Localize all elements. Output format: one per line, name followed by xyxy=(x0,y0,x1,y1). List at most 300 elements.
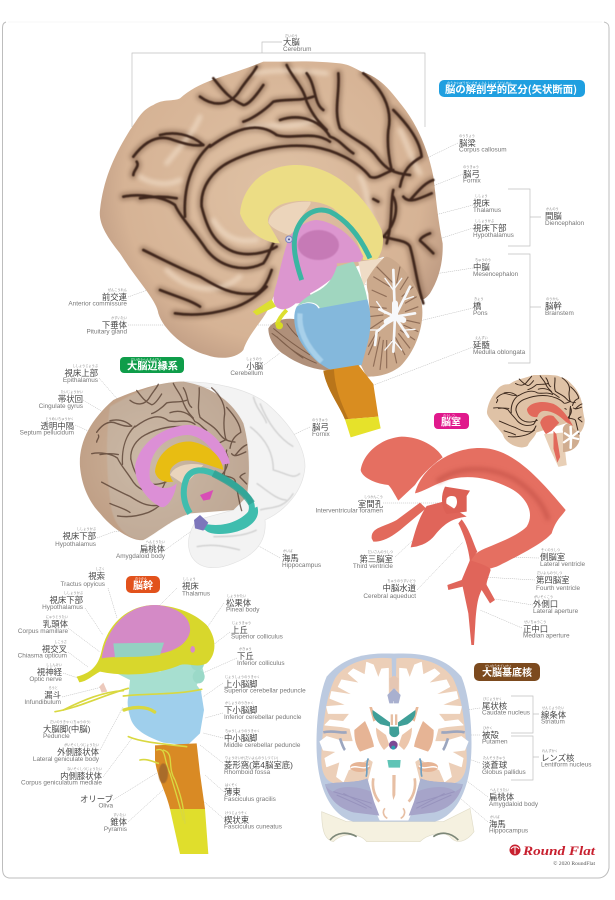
tan limbic cortex xyxy=(80,382,249,540)
midbrain region xyxy=(113,653,204,697)
hollow below callosum xyxy=(268,202,311,235)
label: corpus mamillare xyxy=(18,614,69,635)
label: corpus geniculatum mediale xyxy=(21,766,103,786)
label: brainstem: のうかん xyxy=(546,296,560,301)
bracket: brainstem xyxy=(508,254,541,363)
label: middle cerebellar peduncle: ちゅうしょうのうきゃく xyxy=(225,728,260,733)
label: anterior commissure: 前交連 xyxy=(102,292,128,302)
label: oliva xyxy=(80,794,114,810)
label: medulla oblongata: えんずい xyxy=(475,335,488,340)
label: thalamus: Thalamus xyxy=(473,207,501,214)
label: brainstem: Brainstem xyxy=(545,310,574,317)
teal block on thalamus xyxy=(113,643,164,657)
label: medulla oblongata: 延髄 xyxy=(473,340,490,350)
label: middle cerebellar peduncle: Middle cerebellar peduncle xyxy=(224,742,301,749)
main sagittal brain illustration xyxy=(100,61,443,437)
cerebrum sulci soft shading xyxy=(123,65,433,315)
pons and medulla xyxy=(294,299,371,371)
label: cerebral aqueduct: Cerebral aqueduct xyxy=(363,593,416,600)
label: inferior cerebellar peduncle: 下小脳脚 xyxy=(224,705,258,715)
lower spinal cord xyxy=(345,417,381,437)
label: brainstem hypothalamus: 視床下部 xyxy=(50,595,84,605)
label: optic nerve: ししんけい xyxy=(46,662,62,667)
cerebrum sulci dark lines xyxy=(123,65,433,315)
label: globus pallidus: たんそうきゅう xyxy=(483,755,505,760)
label: third ventricle: だいさんのうしつ xyxy=(368,549,393,554)
label: hypothalamus: ししょうかぶ xyxy=(475,218,495,223)
label: fasciculus gracilis xyxy=(224,782,276,803)
label: striatum: 線条体 xyxy=(541,710,567,720)
label: chiasma opticum: しこうさ xyxy=(54,639,67,644)
label: lentiform nucleus: Lentiform nucleus xyxy=(541,762,591,768)
banner: basal ganglia: 大脳基底核 xyxy=(482,664,532,679)
label: limbic fornix: 脳弓 xyxy=(312,422,329,432)
label: pituitary gland: かすいたい xyxy=(111,315,127,320)
label: brainstem thalamus: ししょう xyxy=(183,576,196,581)
label: lentiform nucleus xyxy=(541,748,591,768)
label: cerebrum: 大脳 xyxy=(283,37,300,47)
label: fasciculus gracilis: 薄束 xyxy=(224,787,241,797)
label: hippocampus: かいば xyxy=(283,548,293,553)
label: cerebellum: Cerebellum xyxy=(230,370,263,377)
left inferior arm xyxy=(372,503,426,542)
anterior lobe folia xyxy=(272,323,317,363)
label: inferior cerebellar peduncle: かしょうのうきゃく xyxy=(225,700,254,705)
thalamus and hypothalamus xyxy=(274,220,363,309)
label: cingulate gyrus: Cingulate gyrus xyxy=(39,403,83,410)
label: cerebral aqueduct: ちゅうのうすいどう xyxy=(387,578,416,583)
base dark folds xyxy=(330,833,458,840)
label: middle cerebellar peduncle: 中小脳脚 xyxy=(224,733,258,743)
label: superior colliculus: じょうきゅう xyxy=(232,620,251,625)
label: cingulate gyrus: たいじょうかい xyxy=(61,389,83,394)
label: middle cerebellar peduncle xyxy=(224,728,301,749)
label: pons: Pons xyxy=(473,310,488,317)
cerebellum white matter arbor xyxy=(370,270,415,352)
label: corpus geniculatum mediale: 内側膝状体 xyxy=(60,771,103,781)
label: fornix: のうきゅう xyxy=(463,164,479,169)
label: tractus opticus: しさく xyxy=(95,566,105,571)
label: fourth ventricle: 第四脳室 xyxy=(536,575,570,585)
label: inferior colliculus: かきゅう xyxy=(239,646,252,651)
label: cerebrum xyxy=(283,33,311,53)
label: fasciculus cuneatus xyxy=(224,810,282,830)
label: pineal body xyxy=(226,593,260,614)
label: thalamus xyxy=(473,193,501,214)
label: corpus geniculatum mediale: ないそくしつじょうたい xyxy=(67,766,102,771)
mesencephalon xyxy=(297,262,367,308)
label: corpus mamillare: Corpus mamillare xyxy=(18,628,68,635)
label: cerebellum: 小脳 xyxy=(246,361,264,371)
coronal left half xyxy=(316,653,394,822)
banner: ventricles: のうしつ xyxy=(443,412,455,418)
label: brainstem hypothalamus: ししょうかぶ xyxy=(64,590,84,595)
bracket: lentiform nucleus xyxy=(511,736,539,780)
label: cerebrum: だいのう xyxy=(285,33,298,38)
label: fasciculus cuneatus: 楔状束 xyxy=(224,815,250,825)
label: cingulate gyrus xyxy=(39,389,83,410)
label: basal amygdaloid body xyxy=(489,787,539,808)
label: cerebellum: しょうのう xyxy=(246,356,262,361)
pineal pink dot xyxy=(190,646,195,653)
label: lateral aperture xyxy=(533,594,579,615)
label: rhomboid fossa: Rhomboid fossa xyxy=(224,769,271,776)
banner: anatomical divisions: のう かいぼうがくてき くぶん しじょうだんめん xyxy=(447,80,512,85)
label: median aperture: 正中口 xyxy=(523,624,548,634)
label: pyramis: 錐体 xyxy=(110,817,128,827)
label: infundibulum xyxy=(24,685,61,706)
label: hippocampus: 海馬 xyxy=(282,553,299,563)
label: optic nerve: Optic nerve xyxy=(29,676,62,683)
label: globus pallidus: 淡蒼球 xyxy=(482,760,508,770)
label: peduncle: 大脳脚(中脳) xyxy=(43,724,91,734)
small cerebellum xyxy=(563,423,580,452)
label: corpus geniculatum mediale: Corpus geniculatum mediale xyxy=(21,780,102,786)
label: interventricular foramen: 室間孔 xyxy=(358,499,384,509)
label: limbic fornix: のうきゅう xyxy=(312,417,328,422)
skull base bone xyxy=(322,808,474,842)
logo: Round Flat xyxy=(510,843,595,867)
label: interventricular foramen xyxy=(316,494,384,514)
aqueduct xyxy=(458,519,477,562)
label: pituitary gland: Pituitary gland xyxy=(86,328,127,336)
label: lateral aperture: がいそくこう xyxy=(534,594,553,599)
label: diencephalon: かんのう xyxy=(546,206,559,211)
label: amygdaloid body: Amygdaloid body xyxy=(116,553,166,560)
label: epithalamus: 視床上部 xyxy=(64,368,99,378)
banner: basal ganglia xyxy=(474,663,540,681)
label: optic nerve xyxy=(29,662,63,683)
label: septum pellucidum: 透明中隔 xyxy=(40,421,74,431)
brainstem illustration xyxy=(55,605,214,854)
label: inferior cerebellar peduncle xyxy=(224,700,302,721)
label: fasciculus cuneatus: けつじょうそく xyxy=(225,810,247,815)
label: basal hippocampus xyxy=(489,814,528,834)
label: peduncle: Peduncle xyxy=(43,733,70,740)
label: corpus callosum: のうりょう xyxy=(459,133,475,138)
foramen ring xyxy=(442,487,470,514)
label: superior colliculus: 上丘 xyxy=(231,625,248,635)
label: pyramis: Pyramis xyxy=(104,826,127,833)
label: brainstem thalamus: Thalamus xyxy=(182,590,210,598)
label: pineal body: Pineal body xyxy=(226,606,260,614)
label: lentiform nucleus: れんずかく xyxy=(542,748,558,753)
cingulate band xyxy=(135,425,230,507)
label: median aperture: Median aperture xyxy=(523,632,570,640)
coronal right half xyxy=(394,653,472,822)
label: third ventricle: 第三脳室 xyxy=(360,554,393,564)
label: septum pellucidum xyxy=(20,416,74,436)
label: interventricular foramen: しつかんこう xyxy=(364,494,383,499)
olive shading xyxy=(159,763,168,783)
corpus callosum xyxy=(240,165,383,260)
label: hypothalamus: 視床下部 xyxy=(473,223,507,233)
label: basal amygdaloid body: へんとうたい xyxy=(490,787,509,792)
bracket: diencephalon xyxy=(508,189,541,246)
label: infundibulum: ろうと xyxy=(48,685,58,690)
label: striatum xyxy=(541,705,567,726)
label: limbic fornix xyxy=(312,417,331,438)
label: corpus mamillare: にゅうとうたい xyxy=(46,614,68,619)
label: epithalamus: Epithalamus xyxy=(63,377,98,384)
label: fourth ventricle xyxy=(536,570,580,592)
label: peduncle: だいのうきゃく(ちゅうのう) xyxy=(50,719,90,724)
label: corpus mamillare: 乳頭体 xyxy=(43,619,69,629)
banner: brainstem: 脳幹 xyxy=(133,577,153,592)
label: mesencephalon: ちゅうのう xyxy=(475,257,491,262)
banner: limbic system: 大脳辺縁系 xyxy=(127,358,178,372)
label: thalamus: ししょう xyxy=(475,193,488,198)
label: globus pallidus: Globus pallidus xyxy=(482,769,526,776)
label: caudate nucleus: びじょうかく xyxy=(483,696,502,701)
label: infundibulum: 漏斗 xyxy=(44,690,61,700)
banner: brainstem xyxy=(126,576,160,593)
label: pons xyxy=(473,296,488,317)
label: lateral ventricle: Lateral ventricle xyxy=(540,561,586,568)
banner: basal ganglia: だいのうきていかく xyxy=(485,663,512,668)
label: putamen: Putamen xyxy=(482,738,508,746)
pons and medulla block xyxy=(128,691,204,745)
label: brainstem thalamus xyxy=(182,576,210,598)
cerebellum xyxy=(360,257,422,377)
cord front strip xyxy=(323,369,348,419)
orange cord segment xyxy=(155,743,205,809)
label: amygdaloid body xyxy=(116,539,166,560)
label: chiasma opticum: 視交叉 xyxy=(42,644,68,654)
label: fasciculus cuneatus: Fasciculus cuneatus xyxy=(224,824,282,830)
label: third ventricle xyxy=(353,549,393,570)
cerebellum anterior lobe behind brainstem xyxy=(268,319,333,370)
label: median aperture: せいちゅうこう xyxy=(524,619,546,624)
label: oliva: オリーブ xyxy=(80,794,114,804)
label: pineal body: しょうかたい xyxy=(227,593,246,598)
label: inferior colliculus xyxy=(237,646,285,667)
label: pons: 橋 xyxy=(473,301,482,311)
third ventricle xyxy=(411,502,467,547)
small brainstem xyxy=(544,432,567,467)
label: basal hippocampus: かいば xyxy=(490,814,500,819)
coronal midline structures xyxy=(389,727,399,737)
label: cerebellum xyxy=(230,356,264,377)
limbic translucent overlay xyxy=(107,382,249,540)
label: anterior commissure: Anterior commissure xyxy=(68,300,127,308)
label: basal amygdaloid body: 扁桃体 xyxy=(489,792,515,802)
fornix and hippocampus xyxy=(184,470,252,528)
label: caudate nucleus: 尾状核 xyxy=(482,701,508,711)
label: lateral ventricle xyxy=(540,547,586,568)
mammillary pink xyxy=(200,490,213,501)
banner: brainstem: のうかん xyxy=(135,576,147,580)
label: cingulate gyrus: 帯状回 xyxy=(58,394,83,404)
label: lateral geniculate body: がいそくしつじょうたい xyxy=(64,742,99,747)
label: pyramis: すいたい xyxy=(113,812,126,817)
label: lateral aperture: Lateral aperture xyxy=(533,608,579,615)
label: hippocampus: Hippocampus xyxy=(282,562,321,569)
label: hypothalamus: Hypothalamus xyxy=(473,232,514,239)
label: rhomboid fossa: 菱形窩(第4脳室底) xyxy=(224,760,293,770)
small infundibulum xyxy=(99,683,107,693)
pituitary stalk and gland xyxy=(276,310,287,329)
label: limbic hypothalamus: 視床下部 xyxy=(62,531,97,541)
label: lateral ventricle: そくのうしつ xyxy=(541,547,560,552)
label: optic nerve: 視神経 xyxy=(37,667,63,677)
label: fornix xyxy=(463,164,482,184)
anterior commissure ring xyxy=(286,236,292,243)
label: medulla oblongata xyxy=(473,335,526,356)
white translucent hemisphere xyxy=(183,382,305,568)
label: superior cerebellar peduncle: じょうしょうのうきゃく xyxy=(225,674,260,679)
label: lateral aperture: 外側口 xyxy=(533,599,558,609)
label: superior colliculus: Superior colliculus xyxy=(231,634,283,640)
optic tract xyxy=(253,299,276,315)
label: lateral ventricle: 側脳室 xyxy=(540,552,565,562)
label: thalamus: 視床 xyxy=(473,198,490,208)
cranial nerves xyxy=(55,688,202,823)
thalamus dark oval xyxy=(298,230,339,260)
cerebral ventricles large model xyxy=(361,437,566,645)
label: septum pellucidum: Septum pellucidum xyxy=(20,430,74,436)
label: fasciculus gracilis: はくそく xyxy=(225,782,238,787)
cerebrum xyxy=(100,61,443,358)
label: inferior cerebellar peduncle: Inferior cerebellar peduncle xyxy=(224,714,302,721)
fourth ventricle and apertures xyxy=(447,560,495,645)
lateral ventricle arch xyxy=(415,448,566,573)
label: median aperture xyxy=(523,619,570,640)
label: epithalamus: ししょうじょうぶ xyxy=(72,363,99,368)
label: rhomboid fossa xyxy=(224,755,293,776)
label: inferior colliculus: 下丘 xyxy=(237,651,254,661)
label: putamen: 被殻 xyxy=(482,730,499,740)
label: pons: きょう xyxy=(474,296,484,301)
small cerebellum arbor xyxy=(564,427,578,448)
small reference brain with ventricles xyxy=(487,375,585,467)
lime cord segment xyxy=(170,809,208,854)
label: brainstem hypothalamus xyxy=(42,590,84,611)
label: mesencephalon: Mesencephalon xyxy=(473,271,519,278)
label: limbic fornix: Fornix xyxy=(312,431,331,438)
bracket: cerebrum xyxy=(132,42,425,127)
label: fasciculus gracilis: Fasciculus gracilis xyxy=(224,796,276,803)
label: chiasma opticum: Chiasma opticum xyxy=(18,652,67,660)
label: striatum: せんじょうたい xyxy=(542,705,564,710)
label: brainstem xyxy=(545,296,574,317)
small cerebrum xyxy=(487,375,585,447)
label: putamen: ひかく xyxy=(483,725,493,730)
label: lateral geniculate body: Lateral geniculate body xyxy=(33,756,100,763)
label: pituitary gland xyxy=(86,315,128,336)
label: third ventricle: Third ventricle xyxy=(353,563,393,570)
banner: limbic system: だいのうへんえんけい xyxy=(131,356,161,362)
cerebellum folia xyxy=(368,267,420,370)
cerebrum highlights xyxy=(140,71,420,289)
label: amygdaloid body: 扁桃体 xyxy=(140,544,166,554)
label: tractus opticus: 視索 xyxy=(88,571,105,581)
label: medulla oblongata: Medulla oblongata xyxy=(473,349,526,356)
coronal section xyxy=(316,653,474,842)
label: epithalamus xyxy=(63,363,99,384)
label: pineal body: 松果体 xyxy=(226,598,252,608)
small ventricle system xyxy=(527,402,573,426)
label: interventricular foramen: Interventricular foramen xyxy=(316,508,383,514)
banner: ventricles: 脳室 xyxy=(441,414,461,428)
label: superior colliculus xyxy=(231,620,283,640)
banner: ventricles xyxy=(434,412,469,429)
white hemisphere gyri xyxy=(197,397,300,550)
label: mesencephalon: 中脳 xyxy=(473,262,490,272)
label: corpus callosum: 脳梁 xyxy=(459,138,476,148)
label: striatum: Striatum xyxy=(541,718,565,726)
label: limbic hypothalamus: ししょうかぶ xyxy=(77,526,97,531)
logo: Round Flat: © 2020 RoundFlat xyxy=(553,860,595,867)
label: lateral geniculate body: 外側膝状体 xyxy=(57,747,100,757)
label: fourth ventricle: Fourth ventricle xyxy=(536,585,580,592)
label: pyramis xyxy=(104,812,128,833)
colliculi bumps xyxy=(191,656,205,683)
label: septum pellucidum: とうめいちゅうかく xyxy=(45,416,74,421)
label: brainstem hypothalamus: Hypothalamus xyxy=(42,604,83,611)
label: limbic hypothalamus: Hypothalamus xyxy=(55,541,96,548)
label: fourth ventricle: だいよんのうしつ xyxy=(537,570,562,575)
label: limbic hypothalamus xyxy=(55,526,97,548)
limbic inner tan xyxy=(170,464,203,485)
label: caudate nucleus: Caudate nucleus xyxy=(482,710,530,716)
label: infundibulum: Infundibulum xyxy=(24,699,61,706)
label: anterior commissure: ぜんこうれん xyxy=(108,287,128,292)
arch inner shadow xyxy=(437,469,548,520)
limbic system brain xyxy=(80,382,305,568)
label: oliva: Oliva xyxy=(98,802,113,810)
leader lines: all dotted connectors xyxy=(62,143,539,822)
optic tract body xyxy=(77,605,214,682)
label: chiasma opticum xyxy=(18,639,68,660)
amygdala xyxy=(194,515,208,531)
cream wedge above mesencephalon xyxy=(358,258,383,288)
label: diencephalon: Diencephalon xyxy=(545,220,585,227)
label: corpus callosum xyxy=(459,133,507,154)
label: inferior colliculus: Inferior colliculus xyxy=(237,660,285,667)
label: anterior commissure xyxy=(68,287,128,308)
label: superior cerebellar peduncle: Superior cerebellar peduncle xyxy=(224,688,306,694)
label: tractus opticus: Tractus opyicus xyxy=(60,581,105,588)
thalamus pink xyxy=(102,605,190,658)
limbic sulci xyxy=(92,383,247,517)
fornix arch xyxy=(294,210,370,280)
label: superior cerebellar peduncle xyxy=(224,674,306,694)
label: lentiform nucleus: レンズ核 xyxy=(541,753,575,763)
label: basal hippocampus: 海馬 xyxy=(489,819,506,829)
label: rhomboid fossa: りょうけいか(だいよんのうしつてい) xyxy=(225,755,278,760)
label: diencephalon xyxy=(545,206,585,227)
pons front highlight xyxy=(300,313,322,362)
corpus callosum band xyxy=(155,442,223,482)
label: cerebral aqueduct xyxy=(363,578,417,600)
label: putamen xyxy=(482,725,508,746)
anterior horn xyxy=(361,437,443,501)
label: tractus opticus xyxy=(60,566,105,588)
label: amygdaloid body: へんとうたい xyxy=(146,539,165,544)
label: peduncle xyxy=(43,719,91,740)
label: corpus callosum: Corpus callosum xyxy=(459,146,507,154)
label: hippocampus xyxy=(282,548,321,569)
label: fornix: Fornix xyxy=(463,178,482,184)
label: basal hippocampus: Hippocampus xyxy=(489,828,528,834)
bracket: striatum xyxy=(511,696,539,733)
label: mesencephalon xyxy=(473,257,519,278)
label: cerebral aqueduct: 中脳水道 xyxy=(382,583,417,593)
small sulci xyxy=(494,376,582,437)
label: lateral geniculate body xyxy=(33,742,100,763)
banner: anatomical divisions: 脳の解剖学的区分(矢状断面) xyxy=(445,81,577,96)
